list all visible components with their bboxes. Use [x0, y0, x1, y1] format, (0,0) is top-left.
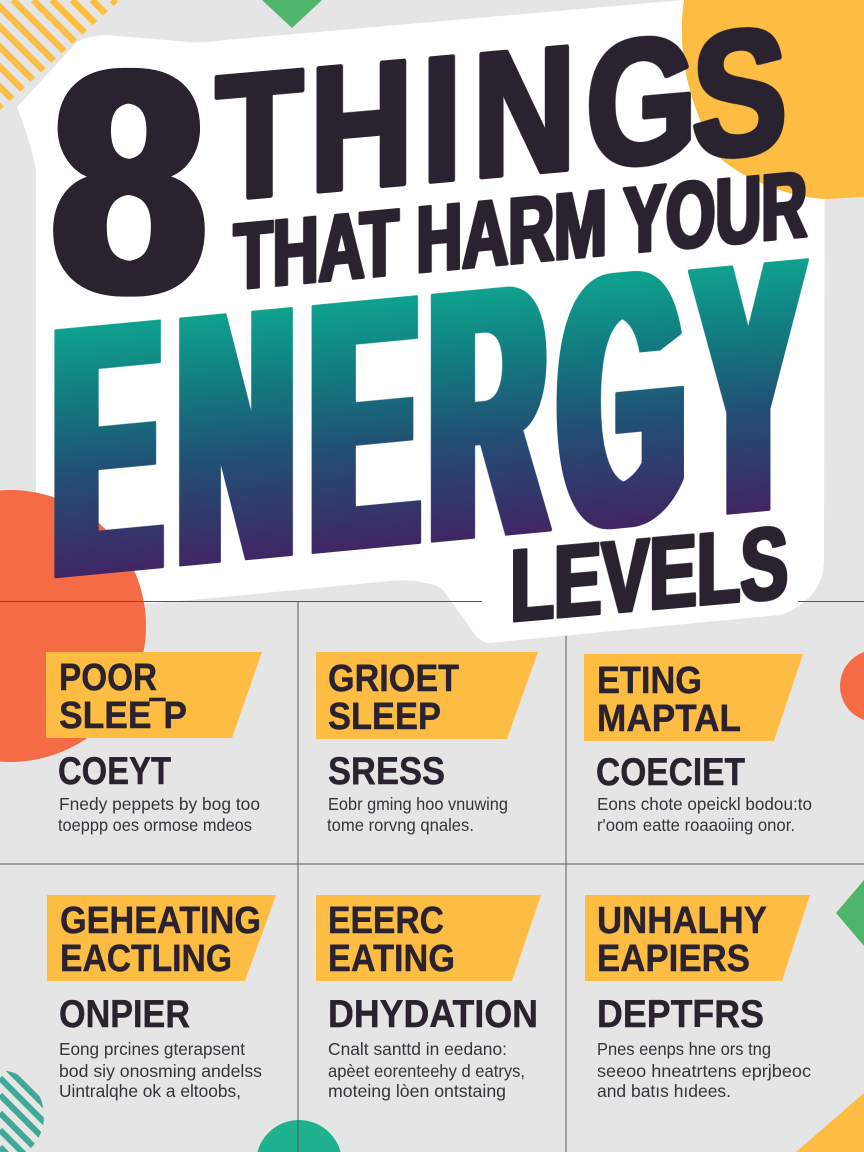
banner [584, 654, 803, 741]
description: Cnalt santtd in eedano: [328, 1039, 507, 1059]
description [58, 794, 260, 835]
panel: card 5 [316, 895, 541, 1101]
description: apèet eorenteehy d eatrys, [328, 1061, 525, 1081]
description [59, 1039, 262, 1101]
subheading: DEPTFRS [597, 993, 764, 1036]
icon: green diamond right [836, 880, 864, 946]
title numeral 8: 8 [52, 6, 206, 359]
banner text: EEERC [328, 900, 444, 942]
banner text [328, 658, 459, 738]
title [52, 0, 807, 653]
banner text: SLEE‾P [59, 695, 187, 737]
description: Eons chote opeickl bodou:to [597, 794, 812, 814]
description [328, 1039, 525, 1101]
description: seeoo hneatrtens eprjbeoc [597, 1061, 811, 1081]
title word LEVELS: LEVELS [510, 504, 788, 643]
subheading: COEYT [58, 750, 171, 793]
panel: card 1 [46, 652, 262, 835]
description: r'oom eatte roaaoiing onor. [597, 815, 795, 835]
panel: card 3 [584, 654, 812, 835]
icon: green semicircle bottom [256, 1120, 342, 1152]
description: and batıs hıdees. [597, 1081, 731, 1101]
banner [46, 652, 262, 738]
description [597, 794, 812, 835]
banner text: ETING [597, 660, 702, 702]
icon: yellow stripes top left [0, 0, 118, 110]
banner text: EACTLING [60, 938, 232, 980]
icon: red circle left [0, 490, 146, 762]
banner text: EAPIERS [597, 938, 750, 980]
banner text: MAPTAL [597, 698, 741, 740]
subheading: SRESS [328, 750, 445, 793]
banner text: POOR [59, 657, 157, 699]
description: bod siy onosming andelss [59, 1061, 262, 1081]
description: Eong prcines gterapsent [59, 1039, 245, 1059]
title word ENERGY: ENERGY [55, 185, 801, 653]
panel: card 2 [316, 652, 538, 835]
panel: white title background [17, 0, 825, 643]
description: Eobr gming hoo vnuwing [328, 794, 508, 814]
title line THAT HARM YOUR: THAT HARM YOUR [234, 152, 807, 309]
banner text: SLEEP [328, 696, 441, 738]
banner [316, 652, 538, 739]
banner [316, 895, 541, 981]
icon: green triangle top [262, 0, 322, 28]
panel: card 6 [585, 895, 811, 1101]
description: Fnedy peppets by bog too [59, 794, 260, 814]
subheading: COECIET [596, 751, 745, 794]
banner text [59, 657, 187, 737]
description: moteing lòen ontstaing [328, 1081, 506, 1101]
description: Pnes eenps hne ors tng [597, 1039, 771, 1059]
banner [47, 895, 276, 981]
banner [585, 895, 810, 981]
grid lines [0, 602, 864, 1152]
description: toeppp oes ormose mdeos [58, 815, 252, 835]
icon: red circle right [840, 650, 864, 722]
banner text: EATING [328, 938, 455, 980]
subheading: DHYDATION [328, 993, 538, 1036]
description [597, 1039, 811, 1101]
description [327, 794, 508, 835]
icon: teal striped circle bottom left [0, 1070, 44, 1152]
banner text [60, 900, 261, 980]
banner text: UNHALHY [597, 900, 767, 942]
icon: yellow triangle bottom right [796, 1093, 864, 1152]
icon: yellow blob top right [682, 0, 864, 199]
panel: card 4 [47, 895, 276, 1101]
subheading: ONPIER [59, 993, 190, 1036]
description: Uintralqhe ok a eltoobs, [59, 1081, 241, 1101]
banner text [597, 900, 767, 980]
banner text [328, 900, 455, 980]
description: tome rorvng qnales. [327, 815, 474, 835]
banner text [597, 660, 741, 740]
banner text: GEHEATING [60, 900, 261, 942]
banner text: GRIOET [328, 658, 459, 700]
